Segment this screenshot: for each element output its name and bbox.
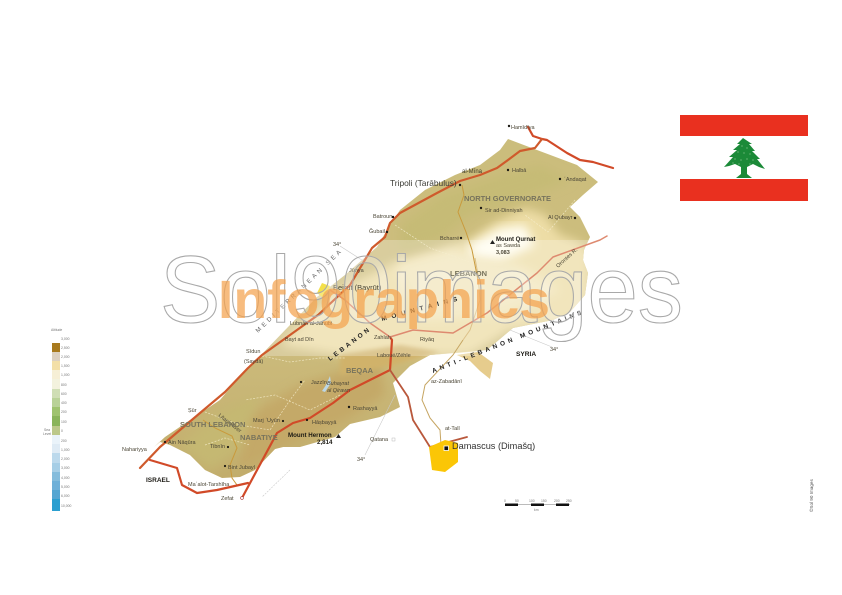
place labels: south: Hāṣbayyā: [312, 420, 337, 426]
place labels: south: ISRAEL: [146, 477, 170, 484]
elevation legend: 200: [61, 410, 67, 414]
elevation legend: 1,500: [61, 364, 70, 368]
sea and latitude lines: [262, 246, 552, 497]
place labels: central: Sīdun: [246, 349, 260, 355]
place labels: central: Lubnān al-Janubi: [290, 321, 332, 327]
place labels: central: Laboué/Zéhle: [377, 353, 411, 359]
scale bar: km: [534, 508, 539, 512]
place labels: central: Jūnya: [349, 268, 365, 274]
urban area: Damascus: [429, 440, 458, 472]
roads: [140, 127, 613, 498]
place labels: Syria: Qatana: [370, 437, 389, 443]
mountain range and sea labels: LEBANON: [327, 325, 373, 363]
elevation legend: 200: [61, 439, 67, 443]
place labels: south: Ṣūr: [188, 408, 197, 414]
place labels: central: Bayt ad Dīn: [285, 337, 314, 343]
place labels: south: Litani River: [217, 413, 242, 435]
place labels: north: Halbā: [512, 168, 527, 174]
place labels: south: 2,814: [317, 439, 333, 446]
scale bar: 0: [504, 499, 506, 503]
place labels: north: al-Mīna: [462, 169, 483, 175]
elevation legend: 5,000: [61, 485, 70, 489]
place labels: north: as Sawda: [496, 243, 521, 249]
place labels: north: ʿAndaqat: [564, 176, 587, 183]
elevation legend: 800: [61, 383, 67, 387]
urban area: Beirut: [317, 283, 330, 297]
place labels: south: Tibnīn: [210, 444, 225, 450]
place labels: central: Buhayrat: [327, 381, 349, 387]
place labels: south: Zefat: [221, 496, 234, 502]
elevation legend: 4,000: [61, 476, 70, 480]
place labels: central: BEQAA: [346, 366, 374, 375]
place labels: north: Al Qubayr: [548, 215, 573, 221]
place labels: south: Nahariyya: [122, 447, 148, 453]
watermark: Sol90images: Sol90images: [160, 237, 683, 343]
place labels: north: NORTH GOVERNORATE: [464, 194, 551, 203]
elevation legend: Sea: [44, 428, 50, 432]
elevation legend: 3,000: [61, 466, 70, 470]
place labels: north: Batroun: [373, 214, 392, 220]
place labels: north: Orontes R.: [555, 247, 579, 269]
place labels: central: Jazzīn: [311, 380, 327, 386]
scale bar: [504, 499, 572, 512]
map: Lebanon relief: [154, 139, 598, 478]
scale bar: 250: [566, 499, 572, 503]
place labels: central: (Saydā): [244, 359, 263, 365]
place labels: north: LEBANON: [450, 269, 487, 278]
place labels: north: Mount Qurnat: [496, 237, 535, 243]
place labels: south: Ain Nāqūra: [168, 440, 196, 446]
elevation legend: Level: [43, 432, 51, 436]
icon: cedar tree: [724, 138, 765, 178]
elevation legend: 1,000: [61, 448, 70, 452]
place labels: south: Bint Jubayl: [228, 465, 255, 471]
place labels: central: Rashayyā: [353, 406, 378, 412]
mountain range and sea labels: ANTI-LEBANON MOUNTAINS: [431, 308, 586, 375]
place labels: south: Marj ʿUyūn: [253, 417, 280, 424]
infographic canvas: [43, 115, 814, 512]
place labels: central: Beirut (Bayrūt): [333, 283, 382, 292]
place labels: north: Bcharré: [440, 236, 459, 242]
place labels: central: Riyāq: [420, 337, 434, 343]
elevation legend: 10,000: [61, 504, 71, 508]
elevation legend: 3,000: [61, 337, 70, 341]
rivers: [203, 185, 480, 485]
place labels: Syria: Damascus (Dimašq): [452, 441, 535, 451]
place labels: Syria: at-Tall: [445, 426, 460, 432]
elevation legend: 400: [61, 401, 67, 405]
highlight band over central Lebanon: [262, 240, 588, 356]
flag of Lebanon: [680, 115, 808, 201]
mountain range and sea labels: [255, 247, 586, 375]
place labels: south: Mount Hermon: [288, 432, 332, 439]
place labels: north: Ğubail: [369, 228, 385, 235]
place labels: north: [369, 125, 587, 278]
place labels: Syria: az-Zabadānī: [431, 379, 462, 385]
district boundaries: [205, 200, 575, 445]
place labels: Syria: [333, 242, 558, 463]
elevation legend: 2,000: [61, 457, 70, 461]
elevation legend: 2,000: [61, 355, 70, 359]
place labels: south: [122, 408, 341, 502]
credit: ©Sol 90 Images: [808, 479, 814, 512]
place labels: south: NABATIYE: [240, 433, 278, 442]
place labels: north: Tripoli (Tarābulus): [390, 178, 457, 188]
elevation legend: [43, 328, 71, 511]
scale bar: 50: [515, 499, 519, 503]
elevation legend: 100: [61, 420, 67, 424]
place labels: Syria: 34°: [550, 347, 558, 353]
place labels: Syria: 34°: [333, 242, 341, 248]
elevation legend: 6,000: [61, 494, 70, 498]
lake: Buhayrat al Qirawn: [322, 376, 331, 392]
place labels: north: 3,083: [496, 250, 510, 256]
place labels: north: Sir ad-Dinniyah: [485, 208, 523, 214]
elevation legend: 1,000: [61, 373, 70, 377]
scale bar: 100: [529, 499, 535, 503]
place labels: central: Zahlah: [374, 335, 391, 341]
place labels: north: Hamīdīya: [511, 125, 535, 131]
mountain range and sea labels: MOUNTAINS: [381, 295, 463, 323]
scale bar: 200: [554, 499, 560, 503]
elevation legend: 2,500: [61, 346, 70, 350]
place labels: south: Maʿalot-Tarshīha: [188, 481, 230, 488]
place labels: south: SOUTH LEBANON: [180, 420, 245, 429]
elevation legend: 600: [61, 392, 67, 396]
watermark: Infographics: Infographics: [218, 270, 550, 330]
scale bar: 150: [541, 499, 547, 503]
elevation legend: 0: [61, 429, 63, 433]
place labels: Syria: SYRIA: [516, 351, 536, 358]
mountain range and sea labels: MEDITERRANEAN SEA: [255, 247, 345, 334]
elevation legend: Altitude: [51, 328, 62, 332]
place labels: central: al Qirawn: [327, 388, 350, 394]
place labels: Syria: 34°: [357, 457, 365, 463]
place labels: central: [244, 268, 434, 412]
